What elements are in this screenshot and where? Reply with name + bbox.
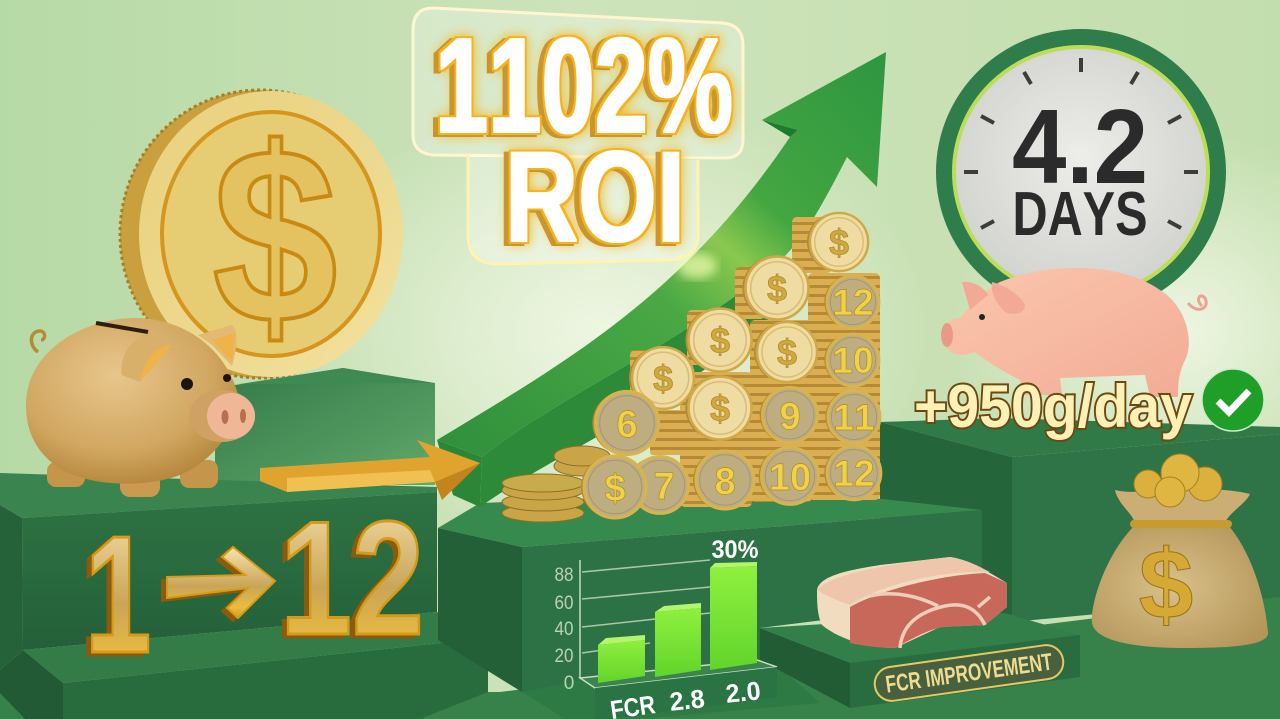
coin 12 top: 12 xyxy=(832,282,874,323)
coin $ front xyxy=(581,456,646,518)
y axis labels: 40 xyxy=(554,619,574,640)
platform: chart base xyxy=(522,665,820,719)
headline 1102%: 1102% xyxy=(435,10,733,161)
weight gain label: +950g/day xyxy=(914,373,1193,440)
big 1 to 12 label xyxy=(85,488,424,688)
coin $ xyxy=(629,347,694,409)
pink pig xyxy=(941,268,1206,397)
flat coin stack xyxy=(502,446,610,522)
platform: right xyxy=(880,418,1280,622)
digits 12: 12 xyxy=(280,488,424,669)
coin $ xyxy=(742,256,808,320)
coin 12 bottom xyxy=(824,446,881,500)
upper left platform xyxy=(215,368,435,485)
y axis labels xyxy=(554,565,574,694)
bar chart xyxy=(554,536,777,719)
y axis labels: 60 xyxy=(554,593,574,614)
coin $: $ xyxy=(710,320,730,361)
digit 1: 1 xyxy=(85,501,151,688)
coin $ xyxy=(685,308,752,372)
coin 7 xyxy=(629,456,688,514)
coin $ xyxy=(685,376,752,440)
platform: floor xyxy=(0,595,1280,719)
y axis labels: 20 xyxy=(554,646,574,667)
coin $ front: $ xyxy=(604,468,626,510)
coin 10 xyxy=(824,334,879,386)
gold piggy bank xyxy=(26,318,255,497)
dollar sign: $ xyxy=(212,97,338,376)
coin 10 xyxy=(759,448,818,504)
coin stacks xyxy=(502,213,881,522)
coin 8: 8 xyxy=(714,461,736,503)
coin 12 top xyxy=(824,276,879,328)
coin 11: 11 xyxy=(833,397,875,438)
y axis labels: 0 xyxy=(564,673,574,694)
ears xyxy=(121,333,175,382)
coin 11 xyxy=(825,391,880,443)
platform: center xyxy=(438,490,982,692)
platform: meat step xyxy=(760,613,1080,708)
money bag xyxy=(1092,454,1268,648)
coin 8 xyxy=(693,451,754,509)
money bag: $ xyxy=(1139,529,1193,639)
clock showing 4.2 days xyxy=(936,29,1226,315)
bars xyxy=(598,640,645,683)
coin 6: 6 xyxy=(616,404,638,446)
coin 9 xyxy=(760,387,818,443)
coin $ top: $ xyxy=(829,222,849,263)
gold arrow to chart xyxy=(260,440,480,500)
glow on arrow xyxy=(677,253,717,279)
coin $: $ xyxy=(767,268,787,309)
coin 9: 9 xyxy=(779,396,801,438)
coin $: $ xyxy=(653,358,673,399)
coin 12 bottom: 12 xyxy=(833,453,875,494)
coin 7: 7 xyxy=(653,466,675,508)
coin $ xyxy=(754,322,817,382)
platform: left step xyxy=(0,473,437,670)
headline ROI: ROI xyxy=(505,126,685,269)
days label: DAYS xyxy=(1012,180,1148,249)
large gold coin xyxy=(120,90,403,378)
FCR axis labels: 2.8 xyxy=(668,683,706,717)
FCR axis labels: 2.0 xyxy=(724,675,762,709)
check badge xyxy=(1202,369,1264,431)
coin 6 xyxy=(592,392,658,454)
ROI glass panel xyxy=(413,8,743,269)
y axis labels: 88 xyxy=(554,565,574,586)
coin $: $ xyxy=(710,388,730,429)
coin $ top xyxy=(807,213,868,271)
small arrow xyxy=(167,547,275,618)
coin 10: 10 xyxy=(769,457,811,499)
coin 10: 10 xyxy=(832,340,874,381)
FCR improvement badge xyxy=(873,643,1065,703)
FCR axis labels xyxy=(608,675,762,719)
snout xyxy=(189,390,255,442)
ridged columns xyxy=(630,217,880,507)
platform: left lower step xyxy=(0,612,488,719)
FCR improvement badge: FCR IMPROVEMENT xyxy=(884,648,1054,699)
coin $: $ xyxy=(777,332,797,373)
4.2 value: 4.2 xyxy=(1012,88,1148,206)
meat xyxy=(817,557,1007,648)
30 percent label: 30% xyxy=(712,536,758,564)
green growth arrow xyxy=(437,52,886,507)
